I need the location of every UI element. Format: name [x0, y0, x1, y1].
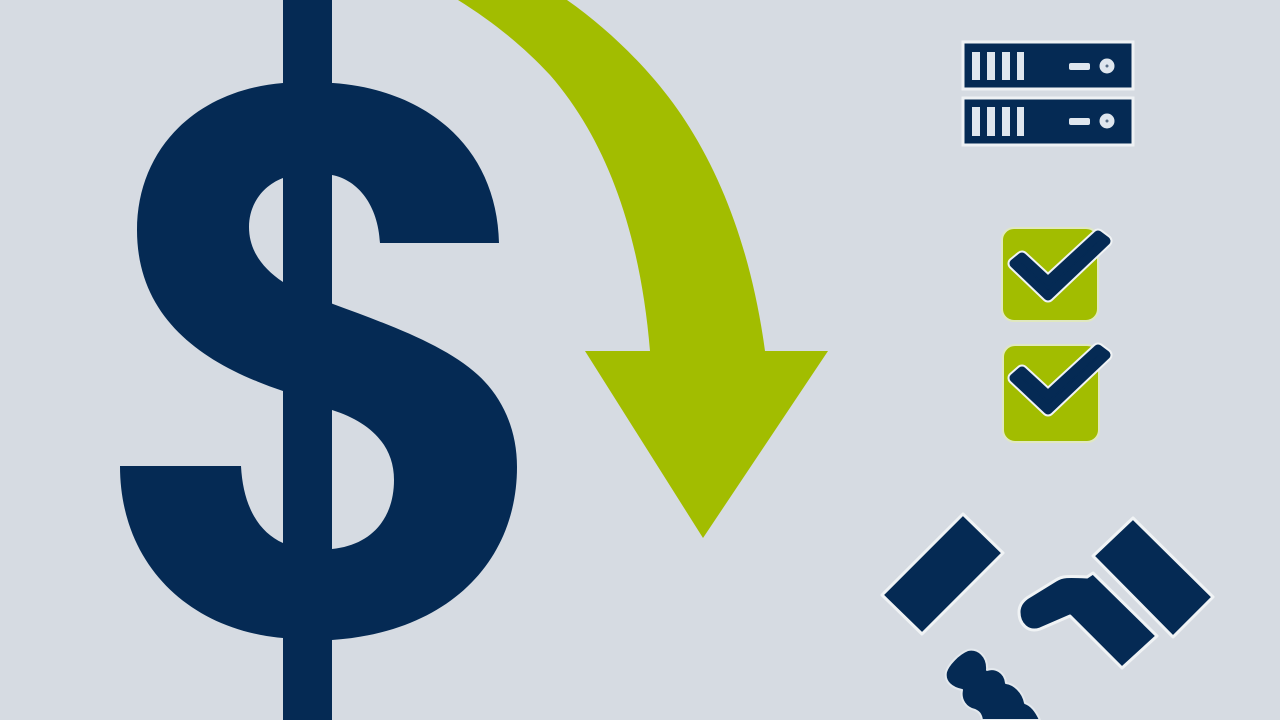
server unit bottom: [963, 98, 1133, 145]
right hand: [1019, 573, 1157, 668]
left hand fingers: [946, 650, 1040, 720]
icon: server stack: [963, 42, 1133, 145]
icon: dollar sign: [120, 0, 517, 720]
right cuff: [1093, 518, 1213, 637]
left cuff: [882, 514, 1003, 634]
icon: checkbox top: [1002, 228, 1106, 321]
server unit top: [963, 42, 1133, 89]
arrow: downward green curve: [458, 0, 828, 538]
icon: checkbox bottom: [1003, 345, 1106, 442]
icon: handshake: [882, 514, 1213, 720]
